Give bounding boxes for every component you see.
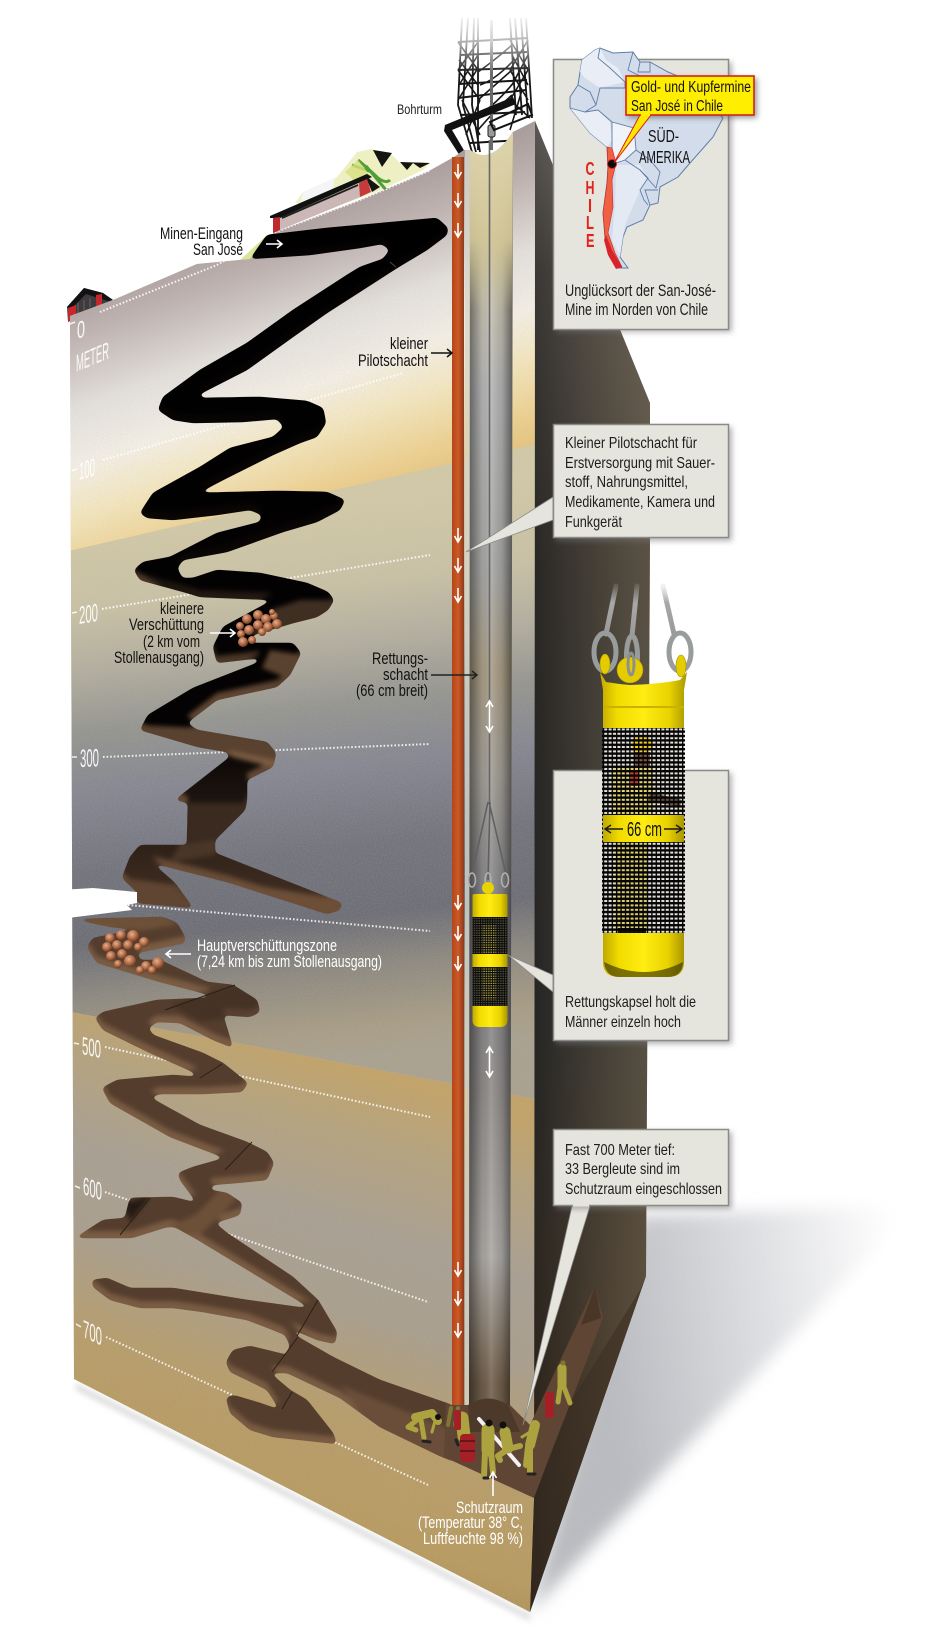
info box: miners <box>554 1130 732 1209</box>
depth scale labels: 200 <box>79 599 98 630</box>
label: Hauptverschüttungszone: (7,24 km bis zum Stollenausgang) <box>197 953 382 971</box>
label: Chile: L <box>586 213 594 233</box>
lugs <box>600 654 686 683</box>
floor of the shelter <box>444 1276 646 1612</box>
miner standing centre <box>484 1420 493 1478</box>
pilot shaft pipe <box>452 157 464 1405</box>
white tube <box>479 1419 519 1465</box>
label: Schutzraum: Schutzraum <box>456 1499 523 1517</box>
arrow: smaller collapse <box>210 629 235 637</box>
rocks: smaller collapse <box>236 609 282 647</box>
surface terrain with mountains <box>240 149 430 260</box>
label: kleinere Verschüttung: Verschüttung <box>129 616 204 634</box>
info box: capsule: Männer einzeln hoch <box>565 1014 681 1031</box>
large rescue capsule <box>594 586 691 977</box>
bottom cap <box>603 933 684 977</box>
text: METER <box>76 337 109 378</box>
info box: pilot shaft <box>554 424 732 541</box>
label: Süd-Amerika: SÜD- <box>648 126 679 146</box>
mine building upper <box>270 174 380 234</box>
depth scale labels: 100 <box>79 454 95 486</box>
depth 0: 0 <box>77 316 85 345</box>
tunnel seams <box>120 262 396 1409</box>
cables <box>606 586 674 636</box>
box pointer joint cover <box>573 1204 589 1206</box>
band arrows and 66 cm: 66 cm <box>627 819 662 841</box>
label: Schutzraum: (Temperatur 38° C, <box>418 1514 523 1532</box>
ground shadow under the block <box>76 1383 530 1621</box>
label: Süd-Amerika <box>639 126 690 167</box>
info box: miners: Fast 700 Meter tief: <box>565 1142 675 1159</box>
rocks: main collapse <box>102 930 164 974</box>
depth lines <box>102 373 430 1485</box>
label: Minen-Eingang: Minen-Eingang <box>160 225 243 243</box>
surface dotted edge <box>100 171 429 312</box>
label: kleinere Verschüttung: Stollenausgang) <box>114 649 204 667</box>
red barrels <box>454 1392 554 1462</box>
info box: map: Mine im Norden von Chile <box>565 301 708 319</box>
arrow: main collapse <box>166 950 191 958</box>
label: Hauptverschüttungszone: Hauptverschüttungszone <box>197 937 337 955</box>
info box: pilot shaft: Kleiner Pilotschacht für <box>565 435 698 452</box>
label: Rettungsschacht <box>356 650 428 700</box>
miners <box>408 1360 570 1478</box>
info box: capsule: Rettungskapsel holt die <box>565 994 696 1011</box>
label: Rettungsschacht: schacht <box>383 666 428 684</box>
miner seated <box>498 1422 520 1460</box>
info box: pilot shaft: stoff, Nahrungsmittel, <box>565 474 688 491</box>
depth scale labels: 700 <box>83 1314 102 1351</box>
mine building left <box>67 288 113 322</box>
map of South America <box>570 48 723 269</box>
depth scale labels: 500 <box>82 1032 101 1064</box>
label: kleiner Pilotschacht <box>358 335 428 370</box>
info box: pilot shaft: Erstversorgung mit Sauer- <box>565 455 715 472</box>
arrow: mine entrance <box>266 240 282 248</box>
arrow: shelter <box>490 1472 496 1496</box>
rescue shaft <box>469 132 513 1405</box>
right dark face of the block <box>530 121 650 1612</box>
label: Chile <box>586 159 594 251</box>
depth ticks <box>70 322 81 1327</box>
label: Rettungsschacht: (66 cm breit) <box>356 682 428 700</box>
info box: miners: Schutzraum eingeschlossen <box>565 1181 722 1198</box>
shaft double arrows <box>486 701 493 1077</box>
top cap <box>600 672 687 728</box>
callout pointer: pilot shaft <box>466 497 553 552</box>
tunnel upper: serpentine mine road <box>122 218 448 914</box>
arrow: rescue shaft <box>431 671 477 679</box>
man inside capsule <box>613 736 682 934</box>
label: Minen-Eingang <box>160 225 243 259</box>
small rescue capsule in shaft <box>468 802 508 1027</box>
label: kleinere Verschüttung: (2 km vom <box>143 633 200 651</box>
label: kleinere Verschüttung: kleinere <box>160 600 204 618</box>
yellow map callout: Gold- und Kupfermine <box>631 79 751 96</box>
arrow: pilot shaft <box>431 349 452 357</box>
depth scale labels <box>76 316 109 1351</box>
label: Chile: E <box>586 231 594 251</box>
depth scale labels: 600 <box>83 1173 102 1206</box>
label: Chile: I <box>588 196 592 216</box>
label: Schutzraum: Luftfeuchte 98 %) <box>423 1530 523 1548</box>
yellow map callout: San José in Chile <box>631 98 723 115</box>
label: kleiner Pilotschacht: Pilotschacht <box>358 352 428 370</box>
tower fade <box>445 12 540 74</box>
info box: capsule <box>554 770 732 1044</box>
label: Chile: H <box>586 178 594 198</box>
rings <box>594 633 691 676</box>
info box: miners: 33 Bergleute sind im <box>565 1161 680 1178</box>
ground shadow right of the block <box>530 1205 915 1612</box>
callout pointer: shelter <box>523 1206 590 1425</box>
callout pointer: capsule <box>508 955 553 992</box>
band <box>603 815 684 842</box>
strip left of the shaft <box>465 150 471 1405</box>
info box: map <box>554 60 732 332</box>
derrick tower <box>444 12 540 156</box>
miner right <box>522 1425 535 1474</box>
label: Hauptverschüttungszone <box>197 937 382 971</box>
mesh interior <box>604 728 683 933</box>
info box: pilot shaft: Funkgerät <box>565 514 622 531</box>
depth scale labels: 300 <box>80 744 99 773</box>
front face with rock strata <box>60 120 550 1620</box>
miner crouching left <box>408 1413 441 1442</box>
info box: pilot shaft: Medikamente, Kamera und <box>565 494 715 511</box>
label: Schutzraum <box>418 1499 523 1548</box>
map text: Unglücksort der San-José- <box>565 282 716 300</box>
label: Bohrturm: Bohrturm <box>397 102 442 117</box>
pilot shaft arrows <box>454 164 462 1337</box>
label: Chile: C <box>586 159 594 179</box>
yellow map callout <box>614 76 757 163</box>
white gap in the wall <box>60 888 137 919</box>
label: kleinere Verschüttung <box>114 600 204 667</box>
miner far right <box>558 1360 570 1403</box>
tunnel lower <box>80 916 452 1461</box>
brown tunnel patches <box>140 725 280 765</box>
label: Minen-Eingang: San José <box>193 241 243 259</box>
label: Rettungsschacht: Rettungs- <box>372 650 428 668</box>
label: Süd-Amerika: AMERIKA <box>639 147 690 167</box>
label: kleiner Pilotschacht: kleiner <box>390 335 428 353</box>
miner standing at barrel <box>448 1408 464 1445</box>
